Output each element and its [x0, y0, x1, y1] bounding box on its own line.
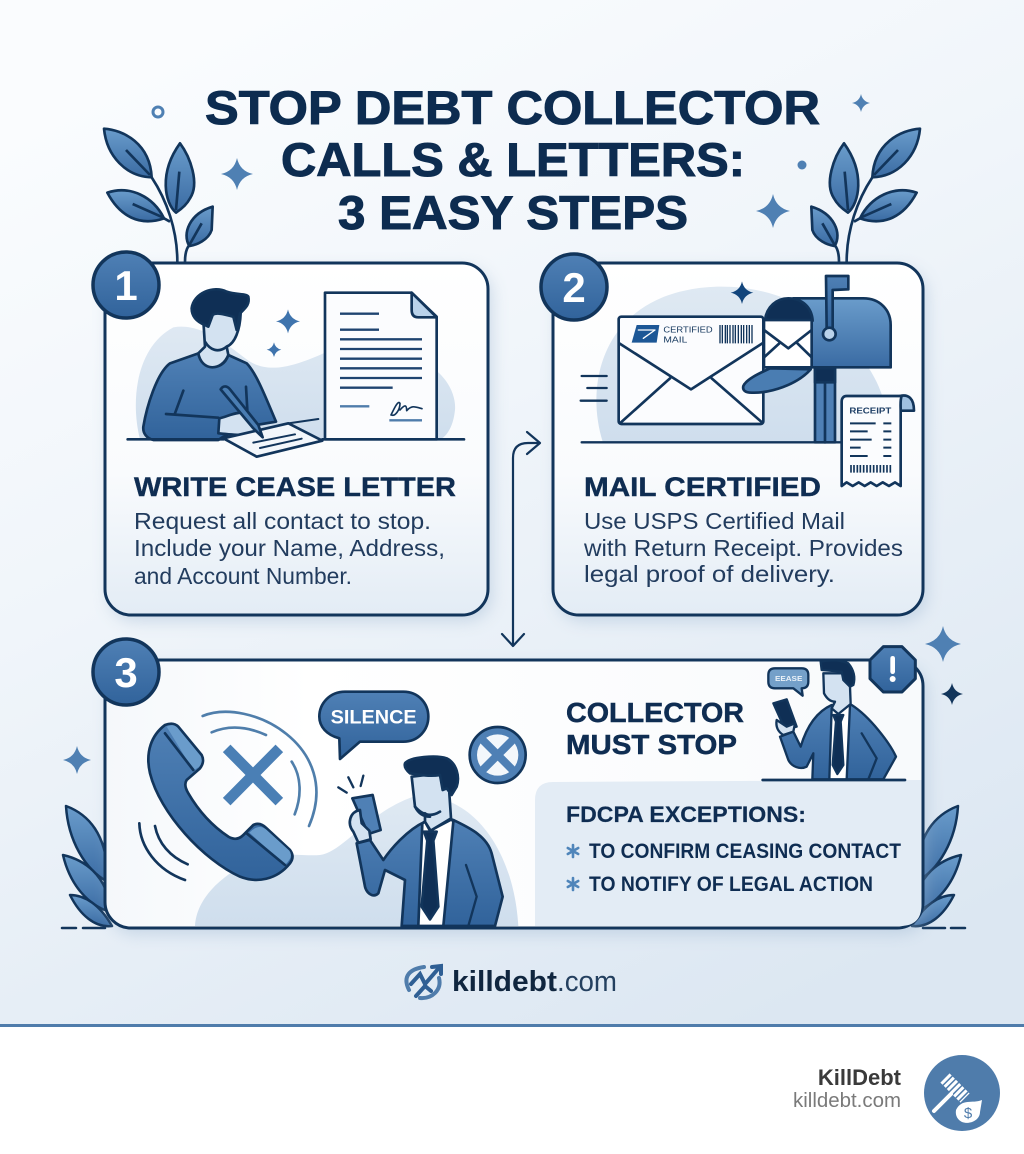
mailbox door	[743, 368, 811, 393]
heading: collector must stop: COLLECTOR	[566, 697, 744, 728]
panel: fdcpa exceptions	[535, 780, 922, 926]
panel: step 2 mail certified	[553, 263, 923, 615]
decorative sparkles and dots	[62, 94, 965, 928]
text: step 1 description	[134, 508, 445, 589]
text: step 2 description: with Return Receipt. Provides	[583, 535, 903, 561]
illustration: collector with phone	[763, 647, 915, 780]
logo: killdebt.com: killdebt	[452, 966, 557, 998]
certified mail envelope	[619, 317, 763, 424]
decorative plant: bottom right	[912, 806, 961, 926]
decorative plant: bottom left	[63, 806, 112, 926]
certified mail envelope: CERTIFIED	[663, 324, 713, 334]
small speech bubble: cease: EEASE	[775, 674, 802, 683]
paper on desk	[223, 423, 322, 457]
speech bubble: silence	[319, 692, 428, 759]
title: CALLS & LETTERS:	[281, 133, 745, 186]
logo: killdebt.com: .com	[557, 966, 617, 998]
text: step 1 description: Include your Name, Address,	[134, 535, 445, 561]
title	[205, 81, 820, 239]
panel: step 1 write cease letter	[105, 263, 488, 615]
receipt	[842, 396, 914, 486]
mailbox	[764, 276, 891, 367]
icon: brand badge gavel and piggy	[924, 1055, 1000, 1131]
mailbox post	[815, 368, 835, 442]
title: STOP DEBT COLLECTOR	[205, 81, 820, 134]
icon: no sign	[470, 727, 526, 783]
icon: logo mark	[406, 966, 441, 998]
logo: killdebt.com	[406, 966, 617, 998]
footer brand text	[793, 1065, 902, 1112]
text: step 2 description	[583, 508, 903, 587]
heading: collector must stop: MUST STOP	[566, 729, 737, 760]
illustration: silenced phone and person	[139, 692, 526, 926]
icon: brand badge gavel and piggy: $	[964, 1105, 973, 1122]
text: step 1 description: and Account Number.	[134, 563, 352, 589]
title: 3 EASY STEPS	[338, 186, 688, 239]
badge: step 2	[541, 254, 607, 320]
heading: mail certified: MAIL CERTIFIED	[584, 472, 821, 502]
x mark	[227, 748, 279, 802]
phone handset	[148, 724, 292, 880]
decorative plant: top left	[104, 129, 213, 262]
card shadows	[109, 269, 927, 934]
icon: warning octagon	[870, 647, 915, 692]
person	[143, 289, 276, 440]
panel: step 3 collector must stop	[105, 647, 923, 928]
badge: step 2: 2	[562, 264, 586, 311]
badge: step 1	[93, 252, 159, 318]
sound waves	[139, 712, 316, 880]
list: exceptions	[568, 840, 901, 896]
footer strip	[0, 1027, 1024, 1154]
text: step 2 description: legal proof of delivery.	[584, 561, 835, 587]
small person	[773, 660, 896, 779]
small speech bubble: cease	[768, 668, 808, 696]
text: step 2 description: Use USPS Certified Mail	[584, 508, 845, 534]
pen	[221, 386, 263, 437]
arrow: step flow between cards	[502, 432, 540, 646]
badge: step 1: 1	[114, 262, 138, 309]
footer brand text: killdebt.com	[793, 1090, 901, 1112]
list: exceptions: TO CONFIRM CEASING CONTACT	[589, 840, 901, 863]
illustration: person writing letter	[128, 289, 464, 457]
badge: step 3: 3	[114, 649, 138, 696]
badge: step 3	[93, 639, 159, 705]
heading: write cease letter: WRITE CEASE LETTER	[134, 472, 456, 502]
receipt: RECEIPT	[849, 405, 892, 415]
document	[325, 293, 437, 439]
heading: fdcpa exceptions: FDCPA EXCEPTIONS:	[566, 802, 806, 827]
illustration: certified mail envelope and mailbox	[581, 276, 914, 486]
list: exceptions: TO NOTIFY OF LEGAL ACTION	[589, 873, 873, 896]
person with phone	[338, 757, 503, 926]
text: step 1 description: Request all contact to stop.	[134, 508, 431, 534]
footer brand text: KillDebt	[818, 1065, 902, 1090]
certified mail envelope: MAIL	[663, 335, 688, 345]
heading: collector must stop	[566, 697, 744, 760]
speech bubble: silence: SILENCE	[331, 707, 417, 728]
decorative plant: top right	[811, 129, 920, 262]
